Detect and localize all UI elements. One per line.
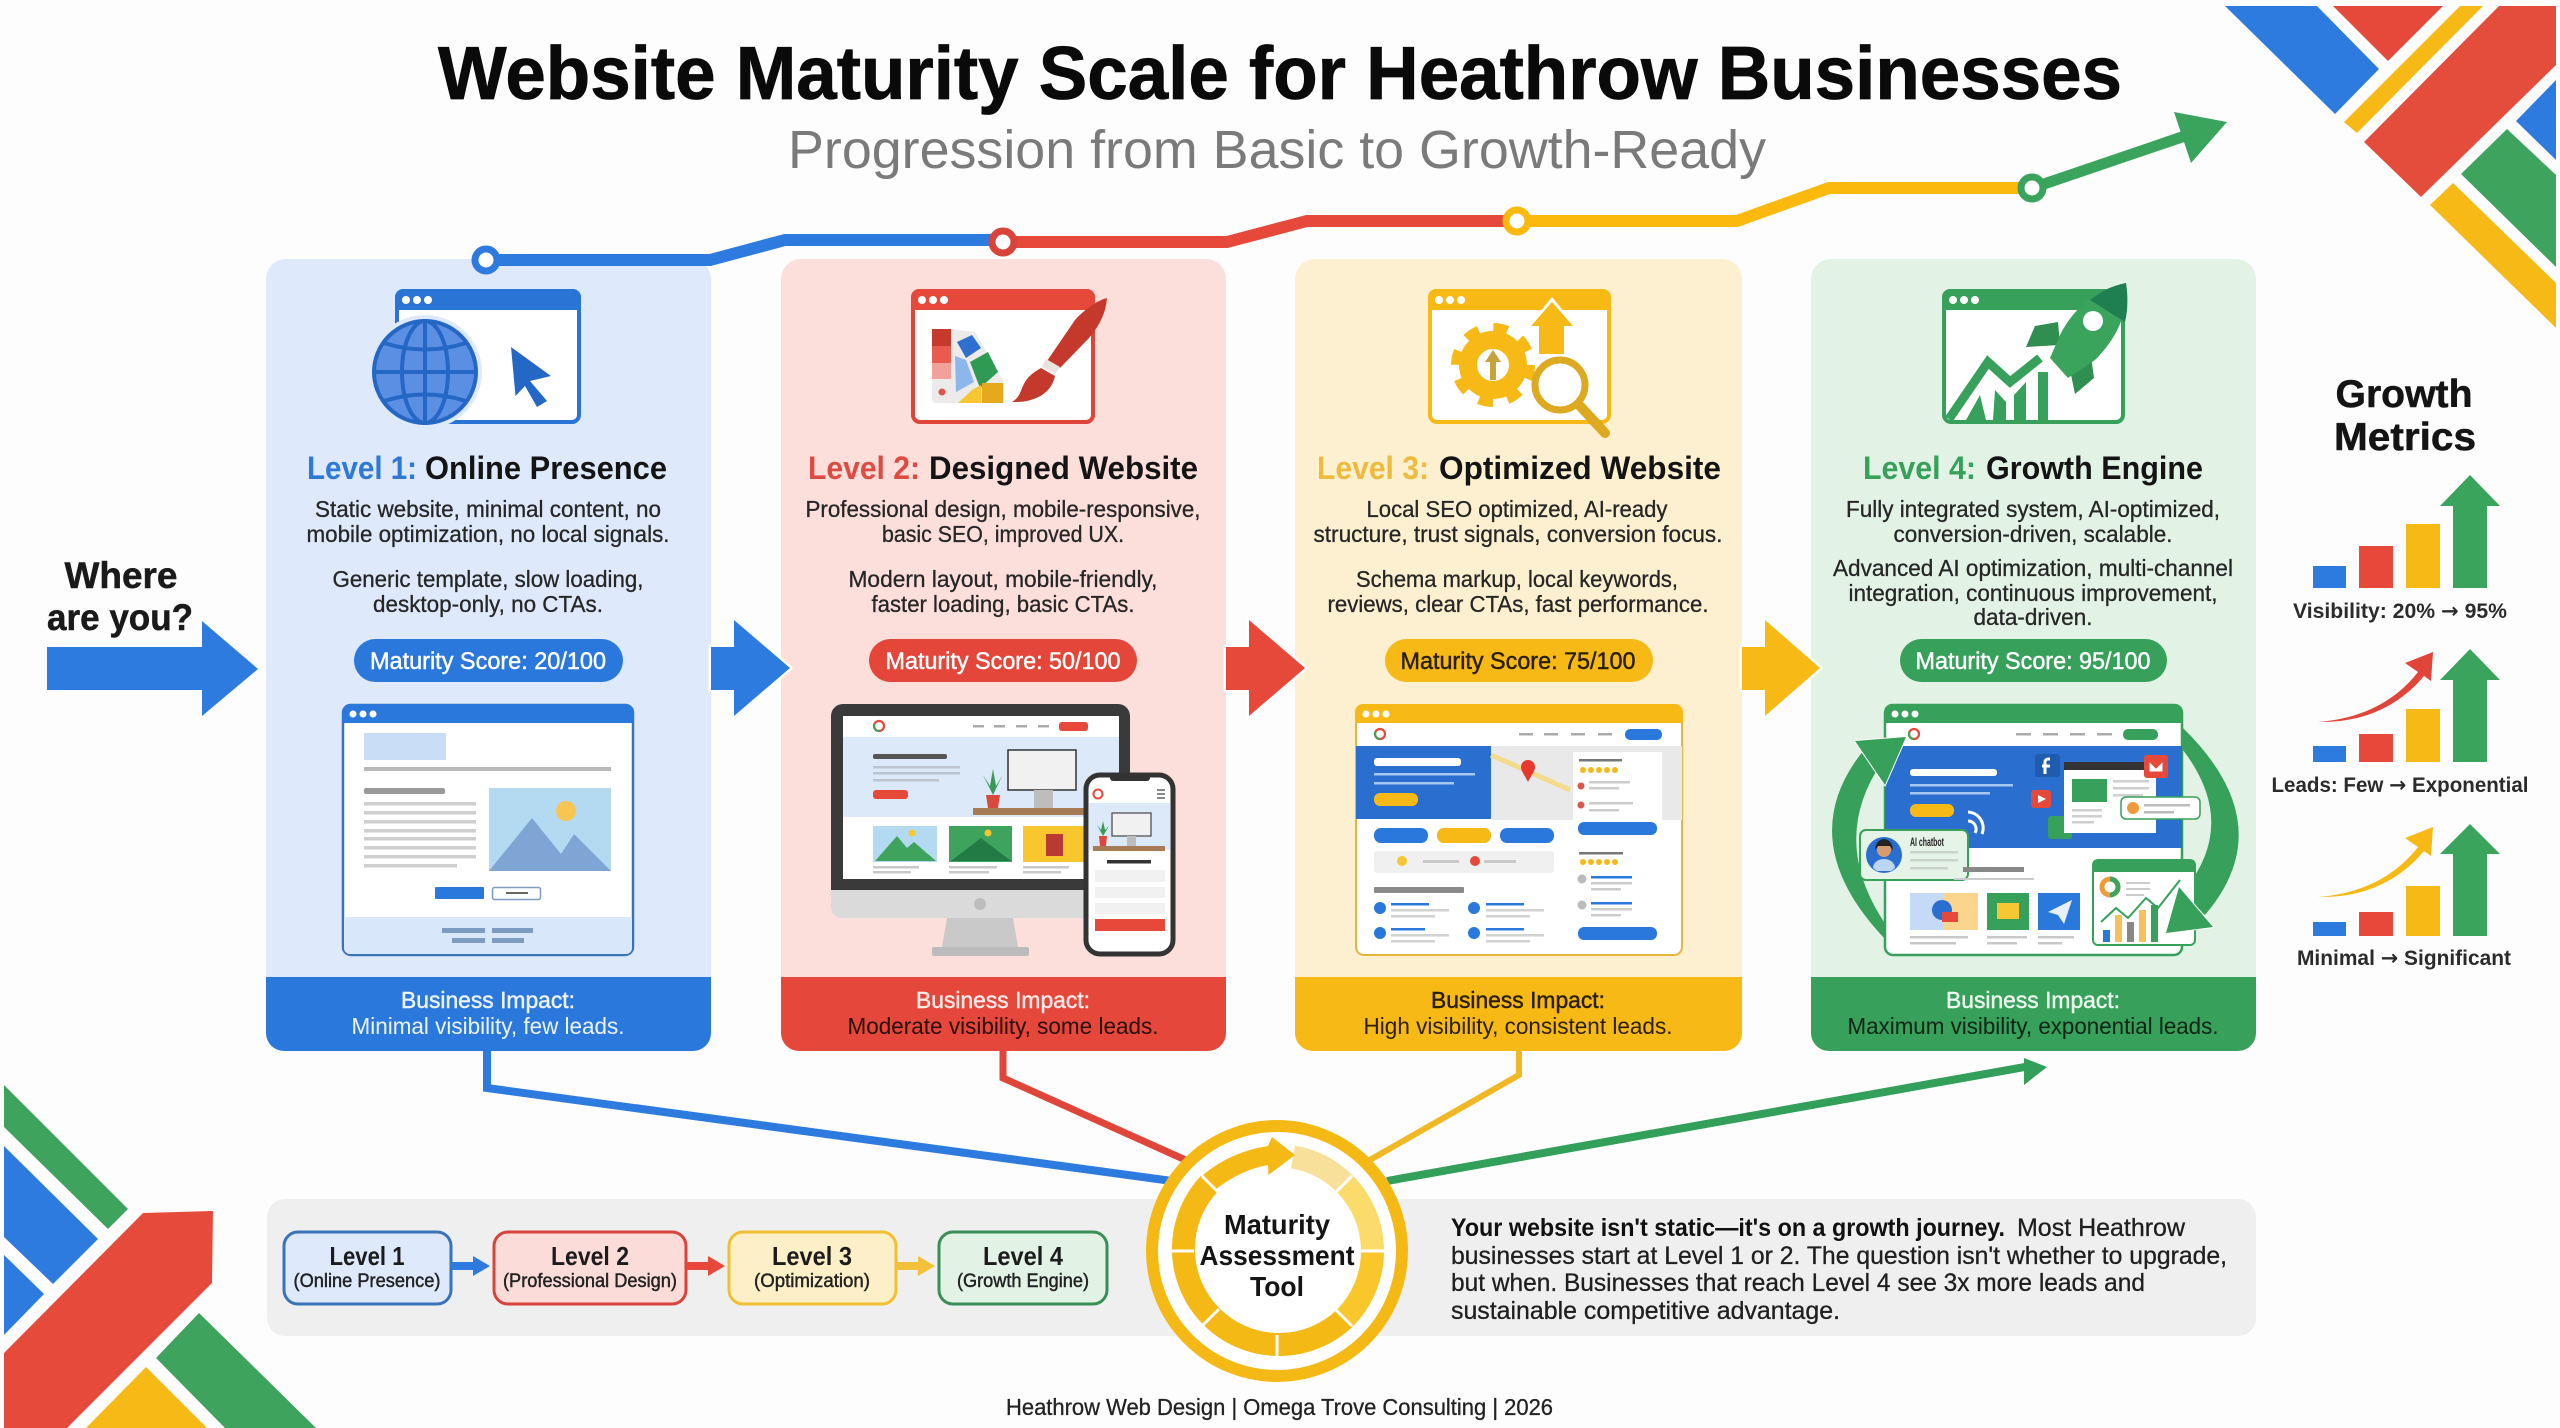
description: level 4: integration, continuous improvement, <box>1848 580 2218 606</box>
subtitle: Progression from Basic to Growth-Ready <box>788 120 1766 180</box>
tool label: Assessment <box>1200 1240 1354 1271</box>
heading: level 1 <box>307 450 667 486</box>
business impact: level 3: High visibility, consistent leads. <box>1364 1013 1672 1039</box>
panel: level 3 <box>1295 259 1742 1051</box>
description: level 2 <box>806 496 1200 617</box>
arrow: chip 2 to 3 <box>686 1256 725 1276</box>
business impact: level 4 <box>1811 977 2256 1051</box>
maturity score badge: level 3: Maturity Score: 75/100 <box>1400 648 1636 675</box>
level chip: 1 <box>284 1232 451 1304</box>
title: Website Maturity Scale for Heathrow Businesses <box>438 31 2122 115</box>
segmented inner ring <box>1183 1157 1372 1345</box>
callout: where are you: Where <box>64 555 178 596</box>
level chip: 1: Level 1 <box>330 1241 404 1271</box>
icon: gear, arrow and magnifier window <box>1428 289 1611 433</box>
description: level 4 <box>1833 496 2233 630</box>
website mockup: local seo <box>1355 704 1683 955</box>
description: level 4: data-driven. <box>1974 604 2092 630</box>
icon: palette and brush window <box>911 289 1107 422</box>
website mockup: basic <box>342 704 634 955</box>
chart: minimal to significant: Minimal → Significant <box>2297 946 2511 970</box>
maturity score badge: level 4 <box>1900 639 2167 682</box>
maturity score badge: level 4: Maturity Score: 95/100 <box>1916 648 2150 675</box>
level chip: 4: (Growth Engine) <box>957 1271 1089 1292</box>
description: level 2: basic SEO, improved UX. <box>882 521 1124 547</box>
description: level 2: faster loading, basic CTAs. <box>872 591 1134 617</box>
panel: level 4 <box>1811 259 2256 1051</box>
maturity score badge: level 2 <box>869 639 1137 682</box>
panel: level 1 <box>266 259 711 1051</box>
heading: level 1: Level 1: <box>307 450 417 486</box>
maturity score badge: level 2: Maturity Score: 50/100 <box>886 648 1120 675</box>
level chip: 2 <box>494 1232 686 1304</box>
heading: level 2: Level 2: <box>808 450 920 486</box>
description: level 3 <box>1314 496 1722 617</box>
level chip: 1: (Online Presence) <box>294 1271 440 1292</box>
growth metrics heading <box>2334 373 2476 459</box>
heading: level 4: Level 4: <box>1863 450 1976 486</box>
maturity score badge: level 1: Maturity Score: 20/100 <box>370 648 606 675</box>
heading: level 3: Level 3: <box>1317 450 1429 486</box>
decoration: top-right corner shapes <box>2225 6 2556 328</box>
summary paragraph: businesses start at Level 1 or 2. The question isn't whether to upgrade, <box>1451 1242 2227 1270</box>
business impact: level 2: Moderate visibility, some leads. <box>848 1013 1158 1039</box>
tool label: Tool <box>1250 1271 1304 1302</box>
level chip: 3: (Optimization) <box>754 1271 870 1292</box>
progress path along top of panels <box>475 112 2227 271</box>
progress arrow on ring <box>1203 1137 1295 1190</box>
level chip: 3 <box>729 1232 896 1304</box>
connector: level 3 to assessment tool <box>1368 1051 1519 1161</box>
description: level 3: Local SEO optimized, AI-ready <box>1366 496 1668 522</box>
decoration: bottom-left corner shapes <box>4 1085 316 1428</box>
summary paragraph: sustainable competitive advantage. <box>1451 1297 1840 1325</box>
level chip: 2: Level 2 <box>551 1241 629 1271</box>
business impact: level 3 <box>1295 977 1742 1051</box>
business impact: level 3: Business Impact: <box>1431 987 1605 1013</box>
panel: level 2 <box>781 259 1226 1051</box>
summary paragraph: Most Heathrow <box>2017 1214 2186 1242</box>
description: level 1: Generic template, slow loading, <box>332 566 644 592</box>
connector: level 2 to assessment tool <box>1003 1051 1190 1162</box>
chart: leads: Leads: Few → Exponential <box>2272 773 2528 797</box>
arrow: chip 1 to 2 <box>451 1256 490 1276</box>
description: level 4: conversion-driven, scalable. <box>1894 521 2172 547</box>
level chip: 2: (Professional Design) <box>503 1271 677 1292</box>
arrow: level 1 to 2 <box>711 620 790 716</box>
summary paragraph: but when. Businesses that reach Level 4 see 3x more leads and <box>1451 1269 2145 1297</box>
summary paragraph: Your website isn't static—it's on a growth journey. <box>1451 1214 2005 1242</box>
business impact: level 4: Business Impact: <box>1946 987 2120 1013</box>
tool label <box>1200 1209 1354 1302</box>
tool label: Maturity <box>1224 1209 1330 1240</box>
arrow: level 2 to 3 <box>1226 620 1305 716</box>
heading: level 2 <box>808 450 1198 486</box>
callout: where are you <box>47 555 258 716</box>
business impact: level 1: Minimal visibility, few leads. <box>352 1013 624 1039</box>
website mockup: growth engine: AI chatbot <box>1910 835 1944 849</box>
website mockup: desktop and phone <box>831 704 1173 956</box>
business impact: level 2: Business Impact: <box>916 987 1090 1013</box>
description: level 1 <box>306 496 670 617</box>
description: level 1: mobile optimization, no local signals. <box>306 521 670 547</box>
arrow: into level 1 <box>47 621 258 716</box>
description: level 1: Static website, minimal content, no <box>315 496 661 522</box>
icon: rocket and chart window <box>1942 283 2127 422</box>
maturity score badge: level 3 <box>1385 639 1653 682</box>
business impact: level 1 <box>266 977 711 1051</box>
description: level 1: desktop-only, no CTAs. <box>373 591 603 617</box>
heading: level 3 <box>1317 450 1721 486</box>
heading: level 3: Optimized Website <box>1439 450 1721 486</box>
summary band <box>267 1199 2256 1336</box>
description: level 3: reviews, clear CTAs, fast performance. <box>1328 591 1708 617</box>
level chip: 4 <box>939 1232 1107 1304</box>
growth metrics heading: Metrics <box>2334 416 2476 459</box>
growth metrics heading: Growth <box>2336 373 2472 416</box>
heading: level 4: Growth Engine <box>1986 450 2203 486</box>
chart: minimal to significant <box>2297 824 2511 970</box>
description: level 4: Advanced AI optimization, multi-channel <box>1833 555 2233 581</box>
arrow: chip 3 to 4 <box>896 1256 935 1276</box>
maturity assessment tool ring <box>1146 1120 1408 1382</box>
heading: level 4 <box>1863 450 2203 486</box>
arrow: level 3 to 4 <box>1742 620 1820 716</box>
business impact: level 4: Maximum visibility, exponential leads. <box>1848 1013 2218 1039</box>
chart: visibility: Visibility: 20% → 95% <box>2293 599 2507 623</box>
callout: where are you: are you? <box>47 597 193 638</box>
business impact: level 2 <box>781 977 1226 1051</box>
business impact: level 1: Business Impact: <box>401 987 575 1013</box>
website mockup: growth engine <box>1832 704 2239 955</box>
description: level 3: structure, trust signals, conversion focus. <box>1314 521 1722 547</box>
description: level 3: Schema markup, local keywords, <box>1356 566 1678 592</box>
summary paragraph <box>1451 1214 2227 1325</box>
connector: assessment tool to level 4 <box>1387 1058 2047 1181</box>
maturity score badge: level 1 <box>354 639 623 682</box>
icon: globe and cursor window <box>368 289 581 429</box>
connector: level 1 to assessment tool <box>487 1051 1172 1181</box>
description: level 2: Modern layout, mobile-friendly, <box>848 566 1158 592</box>
level chip: 3: Level 3 <box>772 1241 852 1271</box>
footer credit: Heathrow Web Design | Omega Trove Consulting | 2026 <box>1006 1394 1553 1420</box>
level chip: 4: Level 4 <box>983 1241 1063 1271</box>
chart: visibility <box>2293 475 2507 623</box>
heading: level 2: Designed Website <box>929 450 1198 486</box>
description: level 2: Professional design, mobile-responsive, <box>806 496 1200 522</box>
heading: level 1: Online Presence <box>425 450 667 486</box>
chart: leads <box>2272 649 2528 797</box>
description: level 4: Fully integrated system, AI-optimized, <box>1846 496 2220 522</box>
